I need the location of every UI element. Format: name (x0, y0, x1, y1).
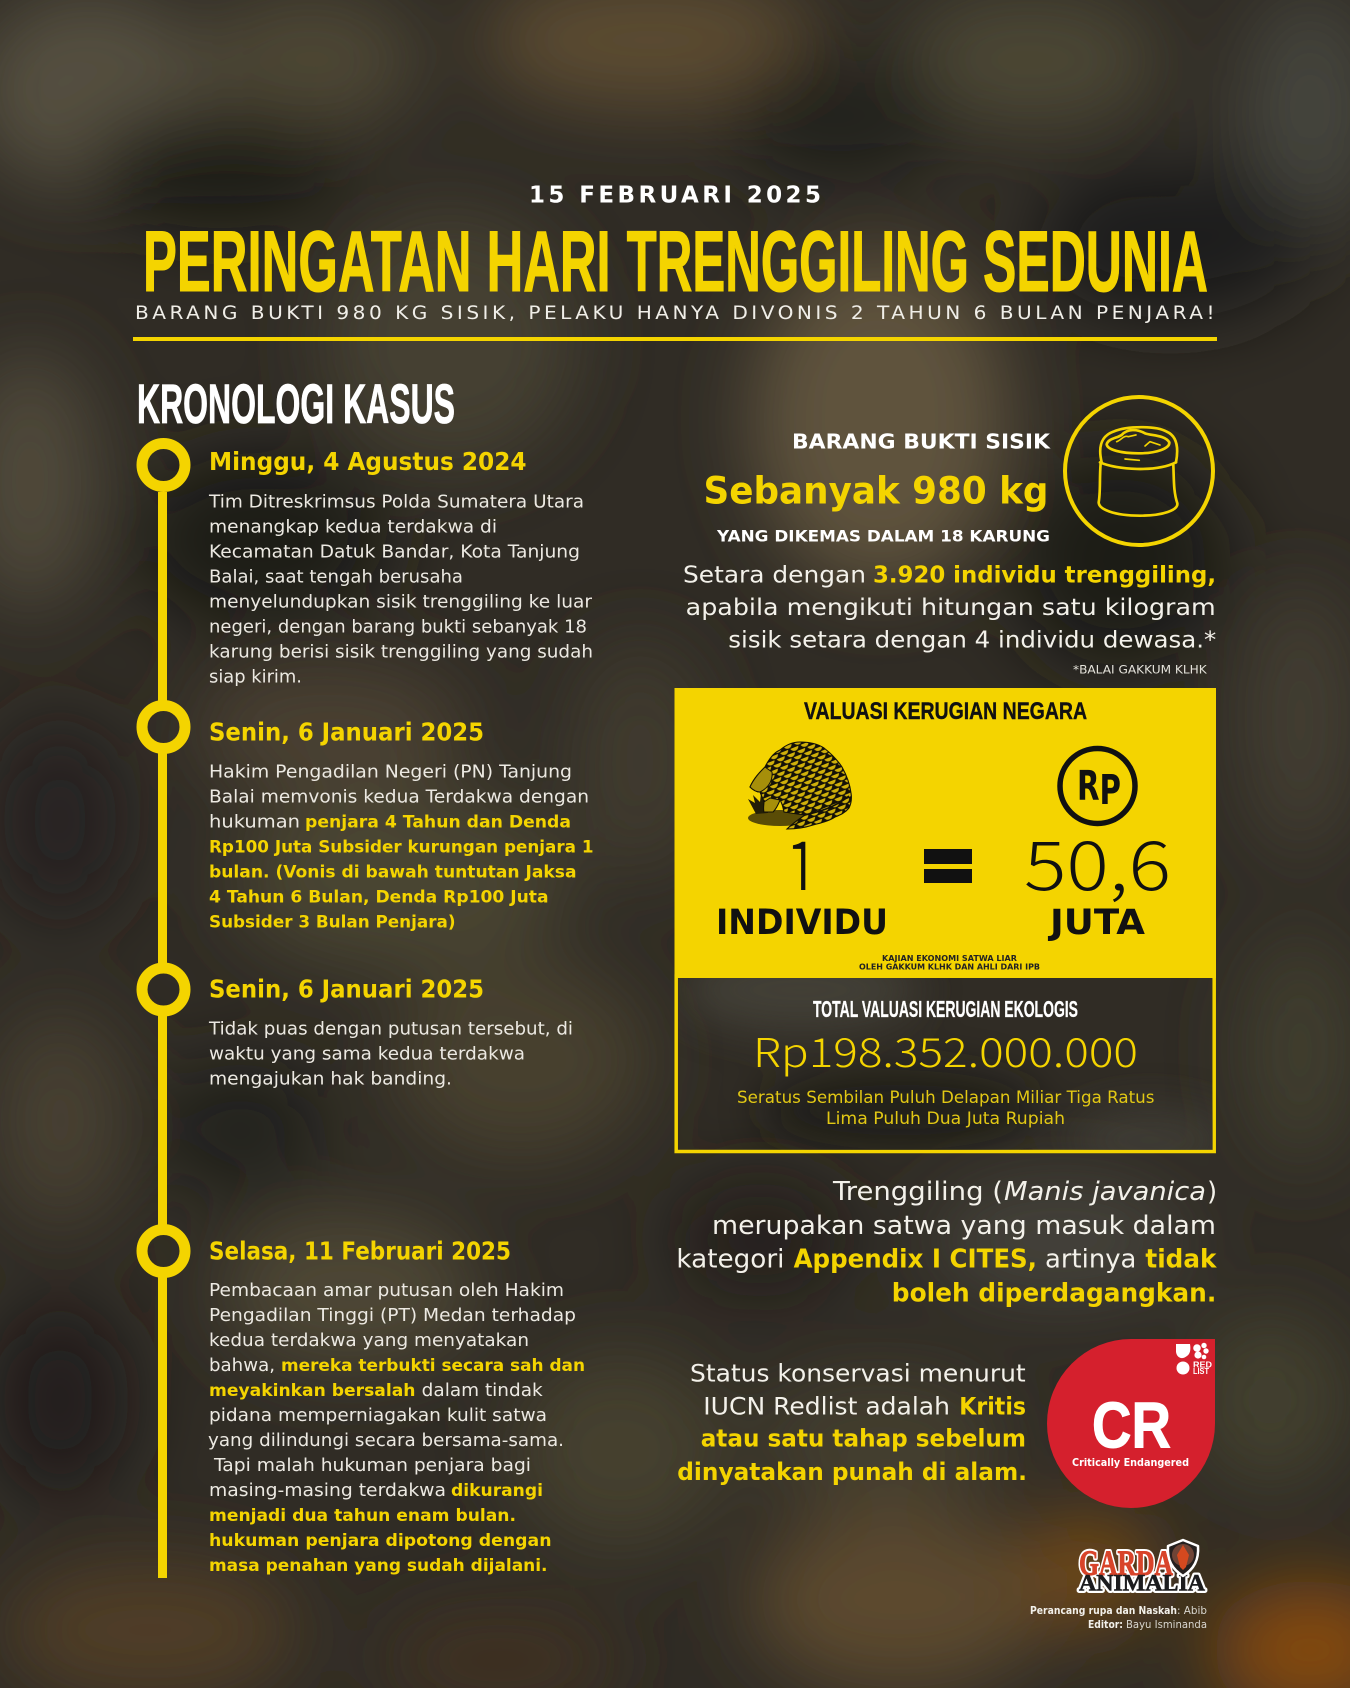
date: 15 FEBRUARI 2025 (529, 183, 821, 209)
panel heading: TOTAL VALUASI KERUGIAN EKOLOGIS (813, 996, 1078, 1022)
text: CITES status: kategori (676, 1244, 784, 1274)
icon: pangolin (748, 742, 851, 829)
timeline entry: 11 Februari 2025: dikurangi (451, 1481, 543, 1501)
CR label: CR (1092, 1388, 1171, 1462)
panel heading: VALUASI KERUGIAN NEGARA (804, 698, 1087, 725)
source note: *BALAI GAKKUM KLHK (1073, 662, 1207, 676)
timeline entry: 11 Februari 2025: yang dilindungi secara bersama-sama. (208, 1431, 564, 1451)
timeline entry: 11 Februari 2025 (208, 1236, 585, 1576)
timeline entry: 11 Februari 2025: Tapi malah hukuman penjara bagi (213, 1456, 531, 1476)
text: IUCN status: atau satu tahap sebelum (701, 1425, 1026, 1453)
number: 50,6: 50,6 (1024, 811, 1171, 910)
timeline entry: 6 Januari 2025 vonis: hukuman (209, 812, 300, 832)
timeline entry: 4 Agustus 2024: negeri, dengan barang bukti sebanyak 18 (209, 618, 587, 638)
timeline entry: 11 Februari 2025: masa penahan yang sudah dijalani. (209, 1556, 548, 1576)
timeline entry: 11 Februari 2025: meyakinkan bersalah (209, 1381, 416, 1401)
timeline entry: 6 Januari 2025 vonis: Senin, 6 Januari 2025 (209, 718, 484, 747)
subtitle: BARANG BUKTI 980 KG SISIK, PELAKU HANYA DIVONIS 2 TAHUN 6 BULAN PENJARA! (135, 303, 1218, 324)
number: 1: 1 (785, 808, 819, 918)
text: CITES status: boleh diperdagangkan. (892, 1278, 1216, 1308)
evidence heading block (704, 430, 1052, 546)
timeline entry: 4 Agustus 2024: Kecamatan Datuk Bandar, Kota Tanjung (209, 542, 580, 562)
timeline entry: 11 Februari 2025: Pembacaan amar putusan oleh Hakim (209, 1281, 564, 1301)
panel: total valuasi kerugian ekologis (674, 974, 1216, 1154)
timeline entry: 11 Februari 2025: menjadi dua tahun enam bulan. (209, 1506, 516, 1526)
text: CITES status: tidak (1145, 1244, 1217, 1274)
badge: critically endangered (1047, 1339, 1215, 1508)
equivalence text (683, 562, 1216, 654)
text: CITES status: merupakan satwa yang masuk dalam (712, 1211, 1216, 1241)
timeline entry: 11 Februari 2025: Selasa, 11 Februari 2025 (209, 1236, 511, 1265)
credits: Perancang rupa dan Naskah (1030, 1605, 1177, 1617)
timeline entry: 6 Januari 2025 vonis: Rp100 Juta Subsider kurungan penjara 1 (209, 838, 594, 858)
text: IUCN status: dinyatakan punah di alam. (677, 1458, 1027, 1486)
timeline entry: 4 Agustus 2024: Tim Ditreskrimsus Polda Sumatera Utara (208, 492, 584, 512)
text: IUCN status: Kritis (959, 1393, 1026, 1421)
timeline entry: 6 Januari 2025 vonis: Hakim Pengadilan Negeri (PN) Tanjung (209, 763, 572, 783)
text: CITES status: Appendix I CITES, (794, 1244, 1037, 1274)
logo: garda animalia: ANIMALIA (1079, 1570, 1205, 1596)
timeline entry: 6 Januari 2025 vonis (209, 718, 594, 932)
text: CITES status: Manis javanica (1004, 1177, 1206, 1207)
equivalence text: sisik setara dengan 4 individu dewasa.* (728, 628, 1216, 654)
text: CITES status (676, 1177, 1217, 1308)
timeline entry: 6 Januari 2025 banding: waktu yang sama kedua terdakwa (209, 1044, 525, 1064)
source note: kajian (859, 953, 1040, 972)
icon: rupiah coin: R (1077, 762, 1109, 810)
total amount: Rp198.352.000.000 (753, 1021, 1138, 1079)
label: juta: JUTA (1048, 903, 1145, 943)
logo: garda animalia: GARDA (1079, 1543, 1173, 1583)
credits: Editor: (1088, 1619, 1123, 1631)
title (143, 214, 1208, 310)
source note: kajian: KAJIAN EKONOMI SATWA LIAR (882, 953, 1018, 963)
timeline entry: 11 Februari 2025: kedua terdakwa yang menyatakan (209, 1331, 529, 1351)
amount in words (737, 1088, 1155, 1129)
caption: Critically Endangered (1072, 1457, 1189, 1469)
timeline entry: 11 Februari 2025: Pengadilan Tinggi (PT) Medan terhadap (209, 1306, 576, 1326)
red list mark: LIST (1193, 1366, 1210, 1376)
logo: garda animalia (1079, 1540, 1205, 1596)
logo: garda animalia: ANIMALIA (1079, 1570, 1205, 1596)
title: PERINGATAN (143, 214, 472, 310)
logo: garda animalia: GARDA (1079, 1543, 1173, 1583)
evidence heading block: Sebanyak 980 kg (704, 469, 1048, 512)
timeline entry: 4 Agustus 2024: menangkap kedua terdakwa di (209, 518, 497, 538)
equivalence text: apabila mengikuti hitungan satu kilogram (686, 595, 1216, 621)
timeline entry: 6 Januari 2025 vonis: penjara 4 Tahun dan Denda (305, 812, 571, 832)
timeline entry: 11 Februari 2025: mereka terbukti secara sah dan (281, 1356, 585, 1376)
equivalence text: 3.920 individu trenggiling, (873, 562, 1216, 588)
timeline entry: 6 Januari 2025 vonis: 4 Tahun 6 Bulan, Denda Rp100 Juta (209, 888, 548, 908)
timeline entry: 6 Januari 2025 banding: Senin, 6 Januari 2025 (209, 974, 484, 1003)
credits (1030, 1605, 1207, 1631)
timeline entry: 4 Agustus 2024: Minggu, 4 Agustus 2024 (209, 447, 526, 476)
timeline entry: 11 Februari 2025: pidana memperniagakan kulit satwa (209, 1406, 547, 1426)
icon: rupiah coin: P (1100, 766, 1121, 814)
text: CITES status: ) (1207, 1177, 1217, 1207)
equivalence text: Setara dengan (683, 562, 866, 588)
timeline entry: 6 Januari 2025 vonis: Subsider 3 Bulan Penjara) (209, 912, 456, 932)
red list mark: RED (1193, 1360, 1212, 1370)
amount in words: Seratus Sembilan Puluh Delapan Miliar Tiga Ratus (737, 1088, 1155, 1108)
title: HARI (487, 214, 611, 310)
equals sign (924, 849, 972, 883)
timeline entry: 4 Agustus 2024: menyelundupkan sisik trenggiling ke luar (209, 592, 593, 612)
text: CITES status: artinya (1045, 1244, 1136, 1274)
heading: kronologi kasus: KRONOLOGI KASUS (137, 372, 455, 435)
timeline entry: 11 Februari 2025: dalam tindak (422, 1381, 544, 1401)
amount in words: Lima Puluh Dua Juta Rupiah (826, 1109, 1065, 1129)
timeline entry: 4 Agustus 2024: Balai, saat tengah berusaha (209, 568, 463, 588)
credits: Bayu Isminanda (1126, 1619, 1207, 1631)
timeline entry: 6 Januari 2025 vonis: Balai memvonis kedua Terdakwa dengan (209, 788, 589, 808)
icon: rupiah coin (1060, 748, 1135, 824)
timeline line and markers (142, 444, 185, 1578)
timeline entry: 6 Januari 2025 banding: mengajukan hak banding. (209, 1069, 452, 1089)
evidence heading block: BARANG BUKTI SISIK (792, 430, 1052, 454)
timeline entry: 11 Februari 2025: masing-masing terdakwa (209, 1481, 446, 1501)
title rule (133, 337, 1217, 341)
evidence heading block: YANG DIKEMAS DALAM 18 KARUNG (716, 527, 1050, 546)
text: IUCN status: Status konservasi menurut (690, 1360, 1026, 1388)
title: TRENGGILING (627, 214, 969, 310)
timeline entry: 4 Agustus 2024 (208, 447, 593, 688)
red list mark (1176, 1343, 1212, 1376)
text: IUCN status (677, 1360, 1027, 1486)
timeline entry: 4 Agustus 2024: siap kirim. (209, 668, 302, 688)
timeline entry: 11 Februari 2025: hukuman penjara dipotong dengan (209, 1531, 552, 1551)
text: IUCN status: IUCN Redlist adalah (703, 1393, 950, 1421)
timeline entry: 4 Agustus 2024: karung berisi sisik trenggiling yang sudah (209, 642, 593, 662)
timeline entry: 11 Februari 2025: bahwa, (209, 1356, 275, 1376)
icon: sack in circle (1065, 397, 1213, 545)
credits: : Abib (1177, 1605, 1207, 1617)
text: CITES status: Trenggiling ( (832, 1177, 1003, 1207)
equation: 1 individu equals 50,6 juta (719, 841, 1168, 941)
timeline entry: 6 Januari 2025 banding (208, 974, 573, 1089)
label: individu: INDIVIDU (716, 903, 888, 943)
panel: valuasi kerugian negara (674, 688, 1216, 978)
source note: kajian: OLEH GAKKUM KLHK DAN AHLI DARI IPB (859, 962, 1040, 972)
timeline entry: 6 Januari 2025 vonis: bulan. (Vonis di bawah tuntutan Jaksa (209, 862, 576, 882)
timeline entry: 6 Januari 2025 banding: Tidak puas dengan putusan tersebut, di (208, 1019, 573, 1039)
